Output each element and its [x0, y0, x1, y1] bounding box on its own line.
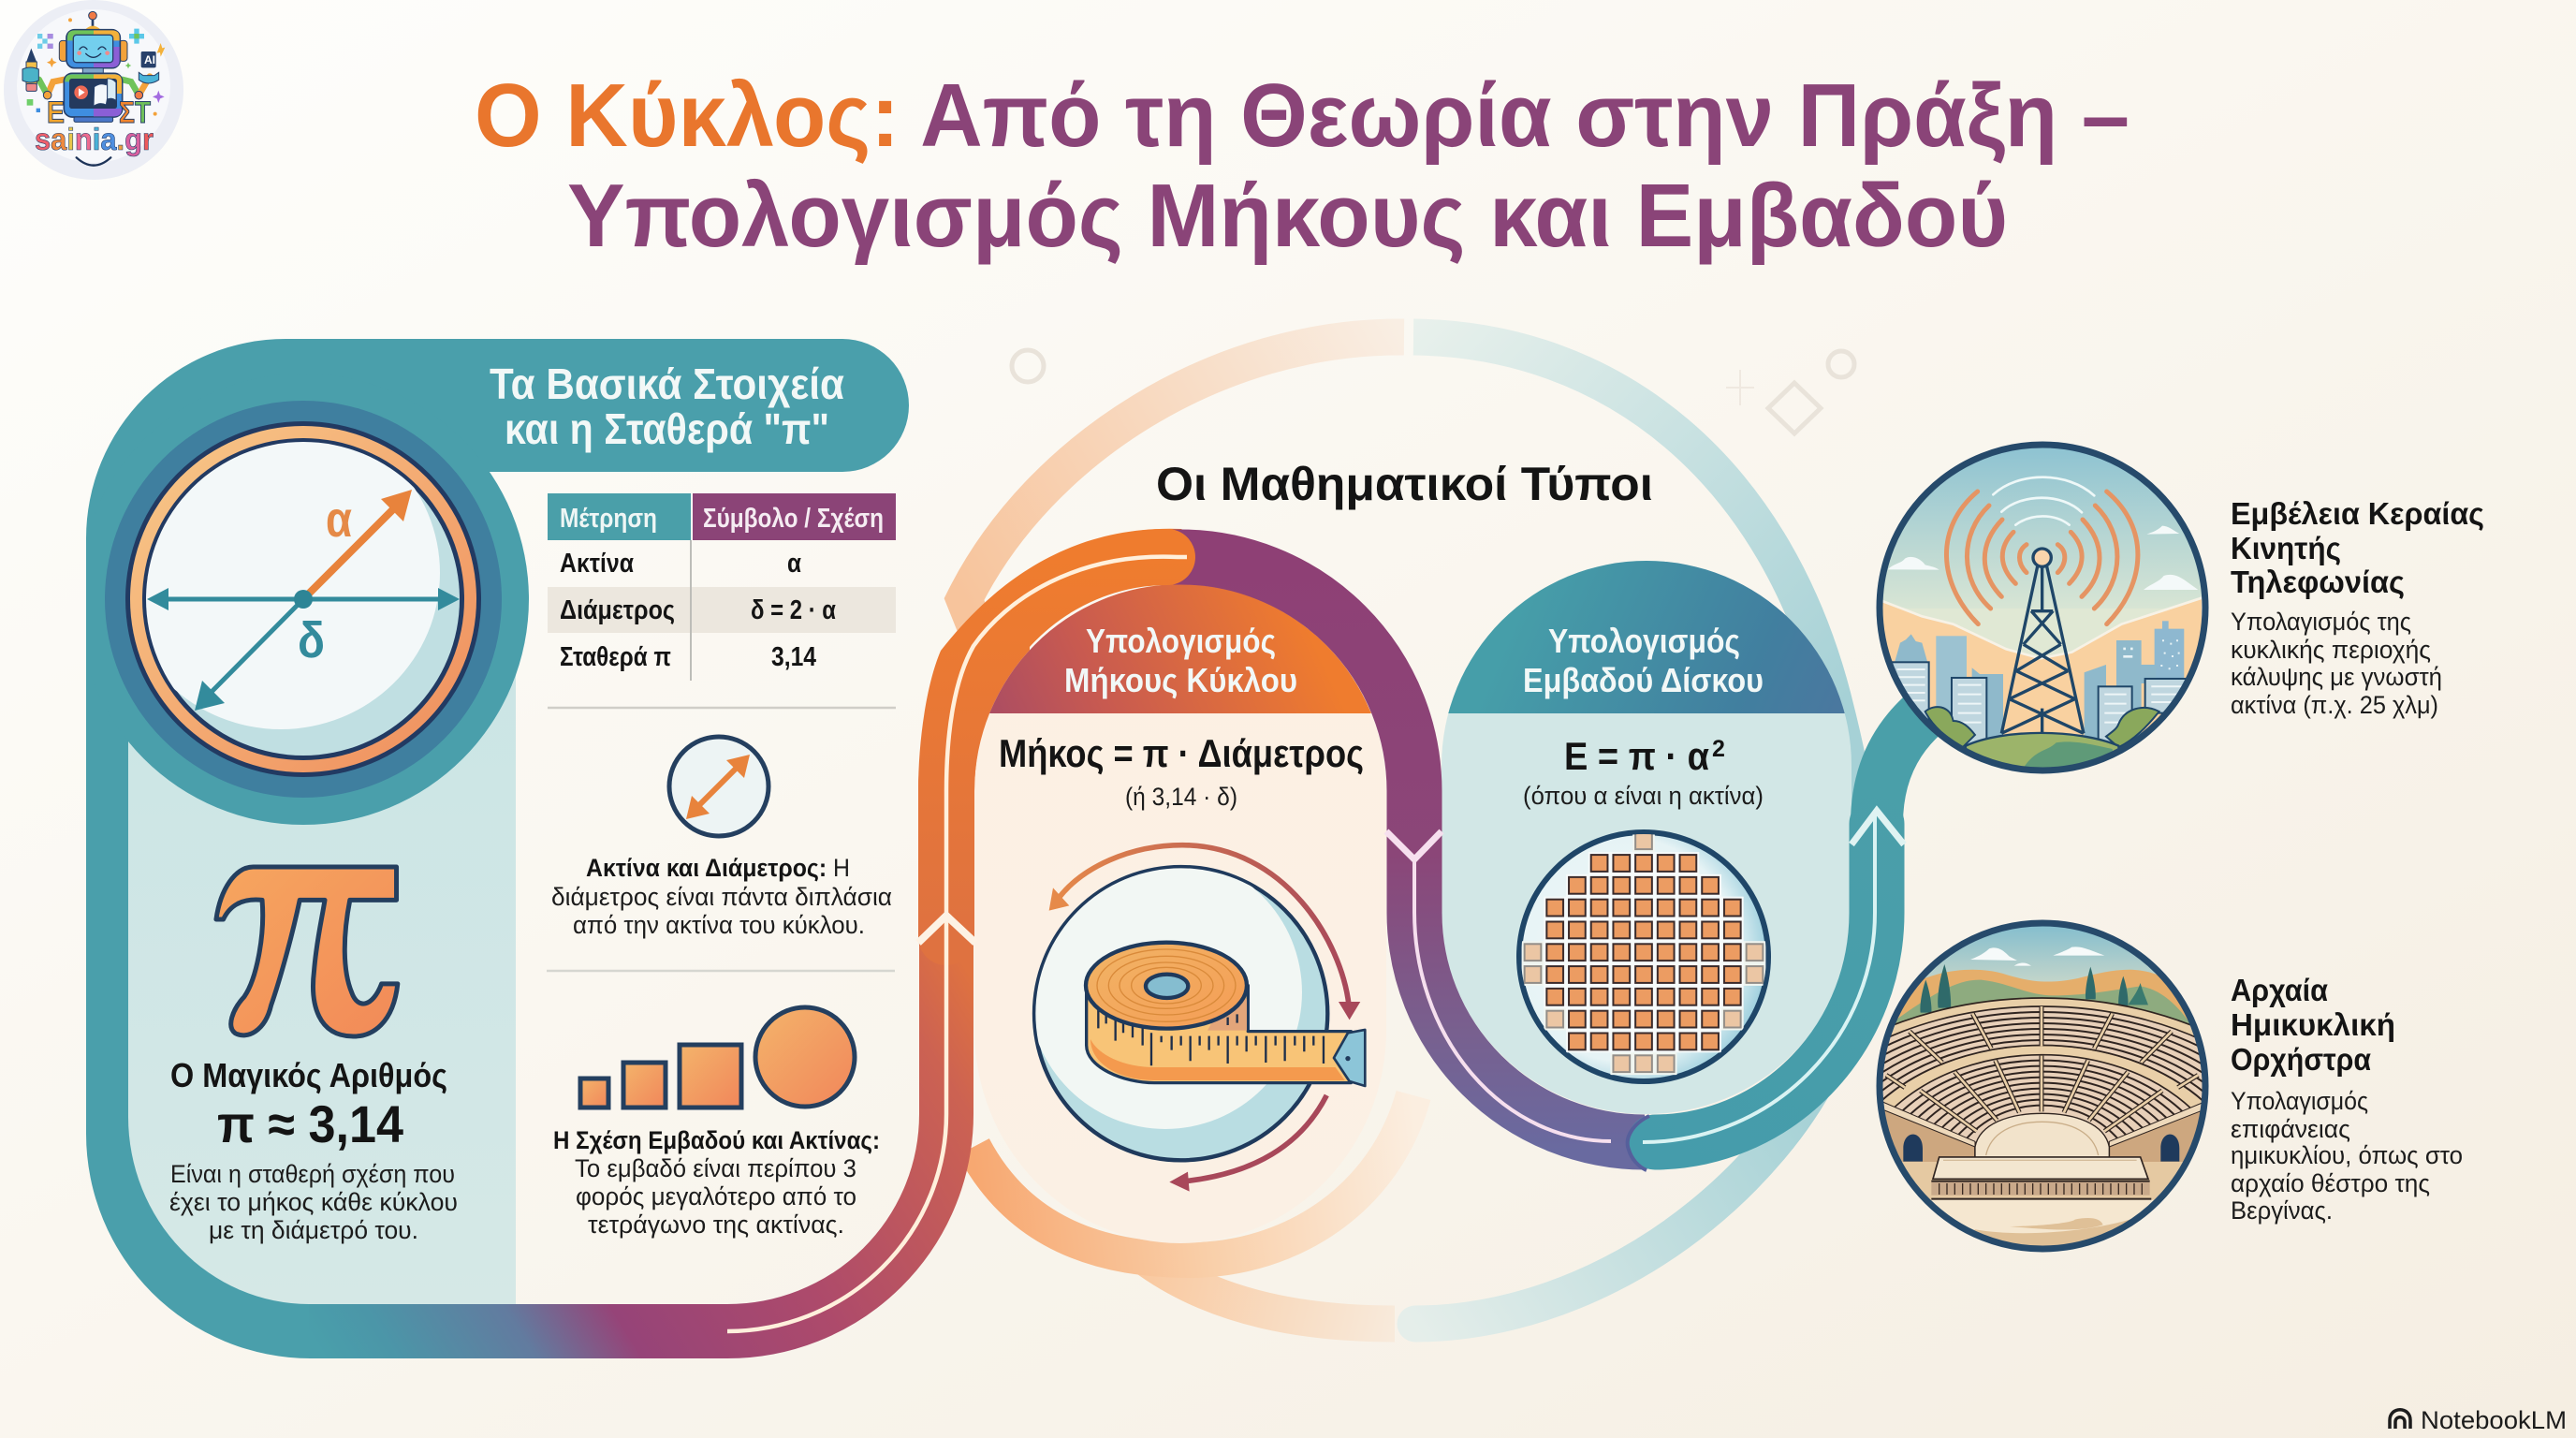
- chip and hand: [139, 72, 159, 83]
- text: ancient orchestra: Αρχαία: [2231, 973, 2328, 1007]
- text: ancient orchestra: αρχαίο θέστρο της: [2231, 1169, 2430, 1197]
- heading: formulas: Οι Μαθηματικοί Τύποι: [1156, 458, 1653, 510]
- text: ancient orchestra: Ημικυκλική: [2231, 1007, 2395, 1042]
- clouds: [1970, 946, 2104, 966]
- header: area: [1448, 561, 1845, 713]
- lower seating tier: [1895, 1054, 2190, 1108]
- formula: area: [1523, 734, 1764, 810]
- radius arrow: [309, 490, 412, 594]
- table: measurements: Σύμβολο / Σχέση: [703, 504, 884, 534]
- logo: sainia.gr robot badge: [4, 0, 183, 180]
- panel: basic elements and pi: [78, 339, 909, 1358]
- hills: [1891, 970, 2197, 1020]
- table: measurements: δ = 2 · α: [751, 595, 836, 625]
- text: ancient orchestra: ημικυκλίου, όπως στο: [2231, 1141, 2463, 1169]
- text: antenna range: Τηλεφωνίας: [2231, 565, 2405, 599]
- hill: [1964, 732, 2119, 766]
- cypress trees: [1920, 964, 2148, 1013]
- text: ancient orchestra: επιφάνειας: [2231, 1115, 2350, 1143]
- header: circumference: Υπολογισμός: [1086, 622, 1276, 660]
- text: magic number: [169, 1056, 458, 1244]
- teal outer frame with header pill: [86, 339, 909, 1358]
- circle diagram with radius and diameter: [105, 401, 529, 825]
- table: measurements: Ακτίνα: [560, 549, 634, 579]
- text: radius and diameter: διάμετρος είναι πάντα διπλάσια: [551, 883, 892, 911]
- arrows around circle: [1060, 845, 1349, 1181]
- footer: NotebookLM mark: NotebookLM: [2421, 1406, 2567, 1434]
- table: measurements: [548, 493, 896, 681]
- title: [475, 66, 2130, 266]
- title: Υπολογισμός Μήκους και Εμβαδού: [567, 166, 2008, 266]
- text: ancient orchestra: Ορχήστρα: [2231, 1042, 2371, 1077]
- text: antenna range: ακτίνα (π.χ. 25 χλμ): [2231, 691, 2438, 719]
- text: area and radius relation: [553, 1126, 880, 1239]
- tape roll: [1086, 943, 1247, 1029]
- icon: growing squares and circle: [580, 1007, 855, 1108]
- formula: area: Ε = π · α: [1564, 734, 1709, 778]
- text: logo letters: [47, 95, 151, 129]
- stage: [1933, 1157, 2148, 1179]
- flow band: purple connector: [1167, 557, 1645, 1142]
- bushes: [1925, 707, 2159, 747]
- side walls and arches: [1885, 1110, 2200, 1162]
- text: magic number: Είναι η σταθερή σχέση που: [170, 1160, 455, 1188]
- ground: [1902, 1162, 2183, 1200]
- upper seating tier: [1891, 997, 2194, 1035]
- header text: και η Σταθερά "π": [505, 404, 829, 453]
- icon: measuring tape in circle: [1029, 845, 1365, 1192]
- signal waves: [1946, 492, 2138, 624]
- panel: light teal pi column: [128, 655, 516, 1304]
- text: area and radius relation: Η Σχέση Εμβαδού και Ακτίνας:: [553, 1126, 880, 1154]
- text: area and radius relation: φορός μεγαλότερο από το: [576, 1182, 856, 1211]
- table: measurements: α: [787, 549, 801, 579]
- text: radius and diameter: από την ακτίνα του κύκλου.: [573, 911, 865, 939]
- text: magic number: έχει το μήκος κάθε κύκλου: [169, 1188, 458, 1216]
- formula: area: 2: [1712, 736, 1725, 762]
- text: ancient orchestra: Βεργίνας.: [2231, 1196, 2333, 1225]
- header: area: Εμβαδού Δίσκου: [1523, 661, 1764, 699]
- decorative outline shapes: [1012, 350, 1854, 433]
- middle walkway: [1883, 1046, 2202, 1107]
- icon: robot mascot: [22, 11, 165, 166]
- text: radius and diameter: [551, 854, 892, 939]
- arms: [39, 77, 150, 95]
- tape tip: [1334, 1030, 1365, 1086]
- text: logo letters: Τ: [135, 95, 151, 129]
- header: area: Υπολογισμός: [1548, 622, 1740, 660]
- text: ancient orchestra: [2231, 973, 2463, 1225]
- text: logo letters: Σ: [119, 95, 135, 129]
- tower: [2001, 549, 2084, 733]
- text: antenna range: Κινητής: [2231, 531, 2341, 565]
- text: logo letters: Ε: [47, 95, 65, 129]
- faint decorative large ring: [964, 337, 1863, 1324]
- table: measurements: Σταθερά π: [560, 642, 671, 672]
- faded orange ring under length panel: [973, 1095, 1413, 1260]
- radial aisles: [1886, 1006, 2198, 1131]
- peach horizon: [1883, 596, 2202, 736]
- label: a: α: [326, 492, 352, 548]
- panel: area formula: [1442, 561, 1852, 1114]
- text: sainia.gr: sainia.gr: [35, 122, 154, 156]
- title: Ο Κύκλος: Από τη Θεωρία στην Πράξη –: [475, 66, 2130, 166]
- text: chip label: AI: [144, 53, 155, 66]
- application: ancient theatre illustration: [1876, 919, 2209, 1253]
- orchestra: [1975, 1113, 2109, 1159]
- label: d: δ: [298, 612, 325, 668]
- text: antenna range: κάλυψης με γνωστή: [2231, 663, 2442, 691]
- clouds: [1888, 526, 2198, 590]
- header: circumference: [989, 584, 1371, 713]
- icon: disc of unit squares: [1519, 829, 1768, 1081]
- header text: [490, 360, 844, 453]
- text: area and radius relation: τετράγωνο της ακτίνας.: [588, 1211, 844, 1239]
- header: circumference: Μήκους Κύκλου: [1064, 661, 1297, 699]
- table: measurements: Διάμετρος: [560, 595, 675, 625]
- diameter arrow: [147, 588, 460, 711]
- flow band: teal connector: [1628, 688, 1961, 1170]
- tape ticks: [1098, 1009, 1324, 1065]
- header text: Τα Βασικά Στοιχεία: [490, 360, 844, 408]
- table: measurements: Μέτρηση: [560, 504, 657, 534]
- icon: pi symbol: [216, 867, 398, 1036]
- tape body: [1087, 986, 1351, 1083]
- text: antenna range: Υπολαγισμός της: [2231, 608, 2411, 636]
- text: antenna range: [2231, 496, 2484, 719]
- formula: circumference: (ή 3,14 · δ): [1125, 783, 1237, 811]
- formula: area: (όπου α είναι η ακτίνα): [1523, 782, 1764, 810]
- panel: circumference formula: [974, 584, 1386, 1243]
- flow band: orange to teal frame: [309, 557, 1187, 1331]
- icon: NotebookLM: [2390, 1410, 2410, 1429]
- text: magic number: με τη διάμετρό του.: [209, 1216, 418, 1244]
- formula: circumference: [999, 731, 1364, 811]
- application: antenna illustration: [1879, 443, 2209, 777]
- text: ancient orchestra: Υπολαγισμός: [2231, 1087, 2368, 1115]
- table: measurements: 3,14: [771, 642, 816, 672]
- city skyline: [1894, 621, 2184, 741]
- windows: [2123, 639, 2180, 669]
- text: antenna range: Εμβέλεια Κεραίας: [2231, 496, 2484, 531]
- sparkles and pixels: [47, 57, 57, 67]
- text: magic number: π ≈ 3,14: [217, 1094, 403, 1153]
- pencil: [26, 49, 37, 63]
- flow band: orange shoulder behind length panel: [918, 529, 1182, 791]
- text: antenna range: κυκλικής περιοχής: [2231, 636, 2431, 664]
- text: magic number: Ο Μαγικός Αριθμός: [170, 1056, 447, 1094]
- formula: circumference: Μήκος = π · Διάμετρος: [999, 731, 1364, 775]
- text: radius and diameter: Ακτίνα και Διάμετρος: Η: [586, 854, 850, 882]
- text: area and radius relation: Το εμβαδό είναι περίπου 3: [575, 1154, 856, 1182]
- icon: circle with diameter arrow: [669, 737, 768, 836]
